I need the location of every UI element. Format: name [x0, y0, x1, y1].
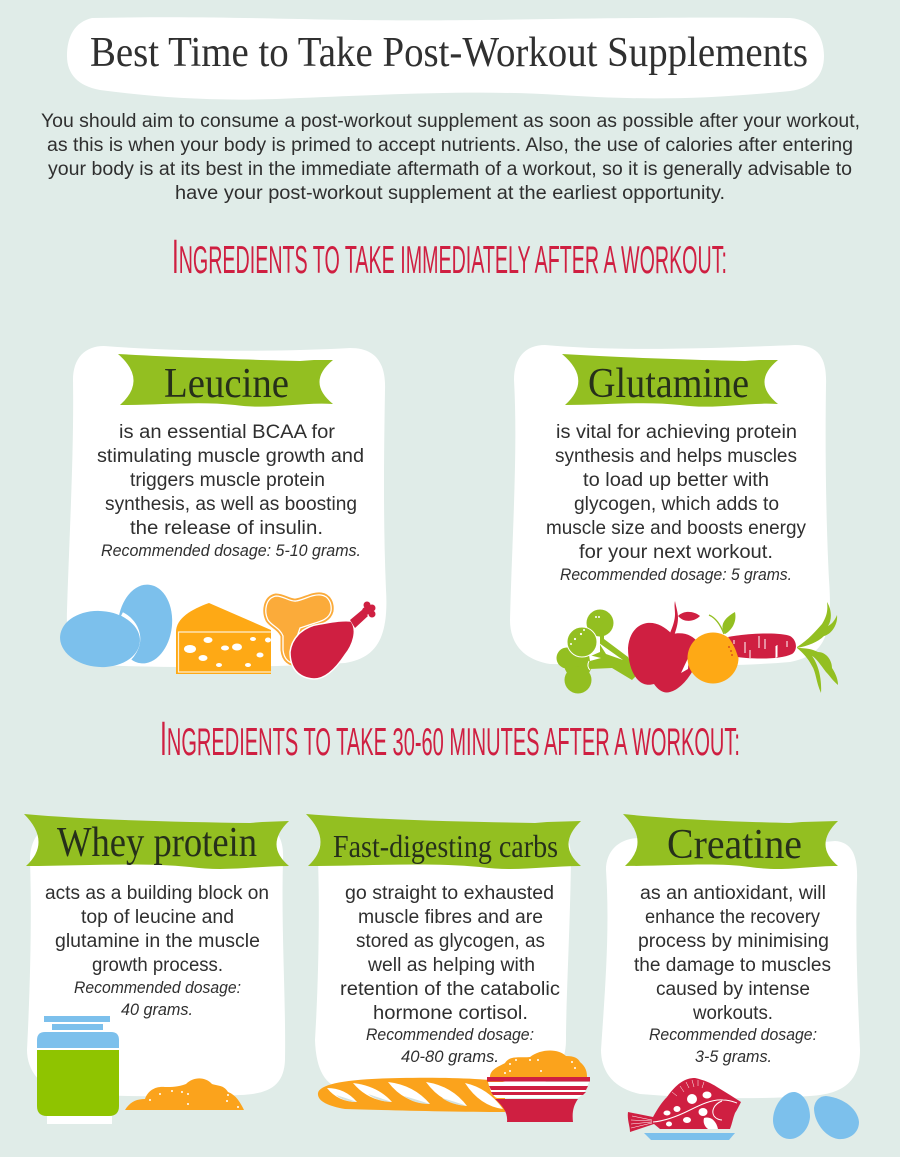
icon: broccoli	[556, 610, 637, 694]
banner: whey protein: Whey protein	[57, 820, 257, 866]
panel: whey protein	[24, 814, 289, 1124]
icon: fish on plate	[628, 1078, 741, 1140]
creatine description: enhance the recovery	[645, 907, 820, 928]
icon: eggs	[773, 1092, 859, 1139]
glutamine description: glycogen, which adds to	[574, 494, 779, 515]
intro text	[41, 111, 860, 204]
banner: creatine: Creatine	[667, 822, 802, 868]
leucine description: triggers muscle protein	[130, 470, 325, 491]
glutamine description: muscle size and boosts energy	[546, 518, 806, 539]
whey protein description: acts as a building block on	[45, 883, 269, 904]
intro text: as this is when your body is primed to accept nutrients. Also, the use of calories after entering	[47, 135, 853, 156]
creatine description: 3-5 grams.	[695, 1048, 772, 1066]
fast-digesting carbs description: retention of the catabolic	[340, 979, 560, 1000]
creatine description	[634, 883, 831, 1066]
fast-digesting carbs description: hormone cortisol.	[373, 1003, 528, 1024]
creatine description: as an antioxidant, will	[640, 883, 826, 904]
leucine description: is an essential BCAA for	[119, 422, 336, 443]
icon: bowl of food	[487, 1050, 590, 1122]
creatine description: the damage to muscles	[634, 955, 831, 976]
icon: apple	[628, 601, 700, 693]
banner: fast-digesting carbs	[306, 814, 581, 869]
banner: creatine	[623, 814, 838, 869]
creatine description: workouts.	[692, 1003, 773, 1024]
icon: powder pile	[125, 1078, 244, 1110]
fast-digesting carbs description: muscle fibres and are	[358, 907, 543, 928]
icon: eggs	[58, 582, 176, 670]
intro text: have your post-workout supplement at the earliest opportunity.	[175, 183, 725, 204]
panel: leucine	[58, 346, 386, 679]
creatine description: Recommended dosage:	[649, 1026, 817, 1044]
glutamine description: synthesis and helps muscles	[555, 446, 797, 467]
panel: creatine	[601, 814, 860, 1140]
fast-digesting carbs description: go straight to exhausted	[345, 883, 554, 904]
whey protein description	[45, 883, 269, 1019]
title: Best Time to Take Post-Workout Supplements	[90, 30, 808, 76]
panel: fast-digesting carbs	[306, 814, 590, 1122]
fast-digesting carbs description: 40-80 grams.	[401, 1048, 499, 1066]
glutamine description: Recommended dosage: 5 grams.	[560, 566, 792, 584]
icon: orange	[688, 612, 738, 684]
banner: glutamine: Glutamine	[588, 361, 749, 407]
fast-digesting carbs description: well as helping with	[367, 955, 535, 976]
icon: cheese	[176, 603, 271, 674]
icon: chicken drumstick	[290, 602, 376, 679]
glutamine description: to load up better with	[583, 470, 769, 491]
whey protein description: Recommended dosage:	[74, 979, 241, 997]
creatine description: process by minimising	[638, 931, 829, 952]
creatine description: caused by intense	[656, 979, 810, 1000]
icon: baguette	[318, 1078, 505, 1112]
icon: carrot	[728, 602, 838, 693]
icon: supplement jar	[37, 1016, 119, 1124]
icon: toast	[266, 595, 331, 664]
glutamine description: is vital for achieving protein	[556, 422, 797, 443]
intro text: your body is at its best in the immediate aftermath of a workout, so it is generally advisable to	[48, 159, 852, 180]
leucine description: synthesis, as well as boosting	[105, 494, 357, 515]
glutamine description	[546, 422, 806, 584]
leucine description	[97, 422, 364, 560]
whey protein description: growth process.	[92, 955, 223, 976]
banner: leucine: Leucine	[164, 361, 289, 407]
fast-digesting carbs description	[340, 883, 560, 1066]
banner: fast-digesting carbs: Fast-digesting carbs	[333, 828, 558, 864]
banner: leucine	[118, 354, 333, 407]
whey protein description: top of leucine and	[81, 907, 234, 928]
fast-digesting carbs description: stored as glycogen, as	[356, 931, 545, 952]
whey protein description: 40 grams.	[121, 1001, 193, 1019]
intro text: You should aim to consume a post-workout supplement as soon as possible after your workout,	[41, 111, 860, 132]
leucine description: stimulating muscle growth and	[97, 446, 364, 467]
leucine description: Recommended dosage: 5-10 grams.	[101, 542, 361, 560]
title	[67, 17, 824, 100]
whey protein description: glutamine in the muscle	[55, 931, 260, 952]
leucine description: the release of insulin.	[130, 518, 323, 539]
panel: glutamine	[510, 345, 838, 694]
glutamine description: for your next workout.	[579, 542, 773, 563]
fast-digesting carbs description: Recommended dosage:	[366, 1026, 534, 1044]
